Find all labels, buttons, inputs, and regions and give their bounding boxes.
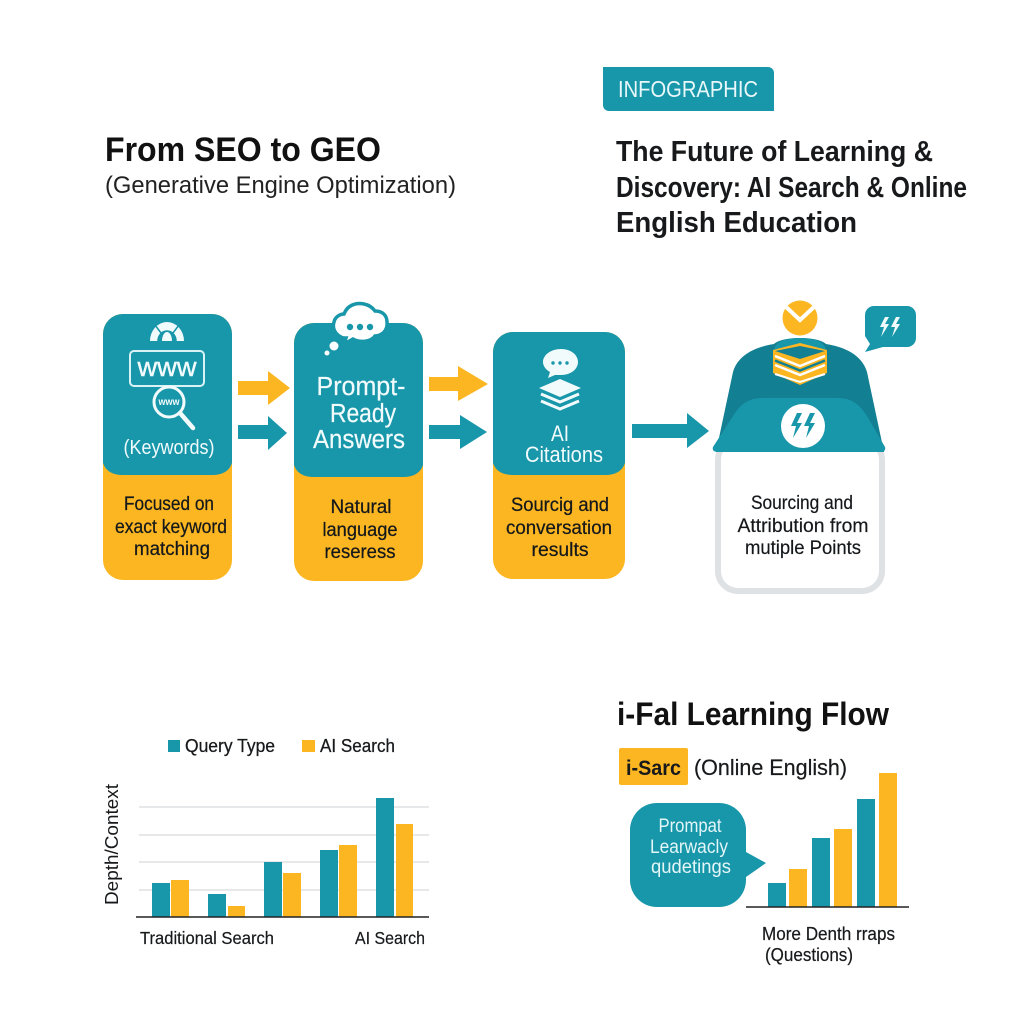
arrow: orange 1	[238, 371, 290, 405]
icon: crown mark	[150, 322, 184, 341]
callout: prompt bubble: Prompat	[658, 816, 722, 837]
card label: AI citations: Citations	[525, 442, 603, 467]
card label: keywords: (Keywords)	[124, 437, 214, 459]
icon: book stack	[773, 338, 827, 385]
panel: keywords card	[103, 314, 232, 580]
result text: Sourcing and	[751, 492, 853, 514]
card text: natural language	[322, 496, 398, 563]
arrow: teal 2	[429, 415, 487, 449]
card text: natural language: reseress	[324, 541, 396, 563]
panel: attribution result	[713, 300, 916, 591]
card text: sourcing	[506, 494, 612, 561]
icon: front cap	[713, 398, 885, 452]
infographic tag: INFOGRAPHIC	[618, 76, 758, 102]
icon: check badge	[782, 300, 818, 336]
panel: AI citations card	[493, 332, 625, 579]
card text: keyword matching: matching	[134, 538, 210, 560]
card text: sourcing: conversation	[506, 517, 612, 539]
card text: sourcing: results	[532, 539, 589, 561]
icon: thought cloud	[324, 303, 387, 356]
heading: learning flow: i-Fal Learning Flow	[617, 696, 889, 732]
chart: learning flow bars	[746, 773, 909, 965]
icon: dark dome	[716, 338, 884, 452]
callout: prompt bubble	[630, 803, 766, 907]
icon: www search box: www	[158, 397, 180, 408]
card text: keyword matching: Focused on	[124, 493, 214, 515]
chart caption: More Denth rraps	[762, 924, 895, 944]
tag: i-Sarc: i-Sarc	[626, 757, 681, 780]
left title: From SEO to GEO	[105, 131, 456, 199]
left title: From SEO to GEO: From SEO to GEO	[105, 131, 381, 169]
right heading: future of learning: The Future of Learning &	[616, 136, 933, 168]
right heading: future of learning: English Education	[616, 207, 857, 239]
legend	[168, 736, 395, 756]
icon: chat and stack	[539, 349, 581, 409]
card label: AI citations: AI	[551, 421, 569, 446]
bars	[152, 798, 413, 917]
arrow: orange 2	[429, 366, 488, 401]
x axis labels: AI Search	[355, 928, 425, 948]
tag: i-Sarc	[619, 748, 688, 785]
arrow: teal 1	[238, 416, 287, 450]
left title: From SEO to GEO: (Generative Engine Optimization)	[105, 172, 456, 199]
right heading: future of learning: Discovery: AI Search & Online	[616, 172, 967, 204]
card label: prompt-ready answers: Ready	[330, 400, 396, 428]
icon: speech bubble	[865, 306, 916, 352]
icon: www search box: www	[136, 352, 197, 382]
card label: prompt-ready answers: Answers	[313, 426, 405, 454]
result text: mutiple Points	[745, 537, 861, 559]
result text	[738, 492, 868, 559]
x axis labels: Traditional Search	[140, 928, 274, 948]
legend: Query Type	[185, 736, 275, 756]
right heading: future of learning	[616, 136, 967, 239]
chart: query type vs AI search	[101, 736, 429, 948]
icon: www search box	[130, 351, 204, 428]
arrow: teal to result	[632, 413, 709, 448]
infographic tag	[603, 67, 774, 111]
card label: prompt-ready answers	[313, 373, 406, 454]
icon: lightning badge	[781, 404, 825, 448]
result text: Attribution from	[738, 515, 868, 537]
card text: natural language: Natural	[330, 496, 392, 518]
card text: keyword matching	[115, 493, 227, 560]
card text: natural language: language	[322, 519, 398, 541]
chart caption: (Questions)	[765, 945, 853, 965]
card label: prompt-ready answers: Prompt-	[316, 373, 406, 401]
x axis labels	[140, 928, 425, 948]
card text: keyword matching: exact keyword	[115, 516, 227, 538]
chart caption	[762, 924, 895, 965]
callout: prompt bubble: Learwacly	[650, 837, 728, 858]
callout: prompt bubble: qudetings	[651, 857, 731, 878]
card text: sourcing: Sourcig and	[511, 494, 609, 516]
legend: AI Search	[320, 736, 395, 756]
subheading: online english: (Online English)	[694, 755, 847, 780]
y axis label: Depth/Context	[101, 784, 122, 905]
panel: prompt-ready card	[294, 303, 423, 581]
card label: AI citations	[525, 421, 603, 467]
